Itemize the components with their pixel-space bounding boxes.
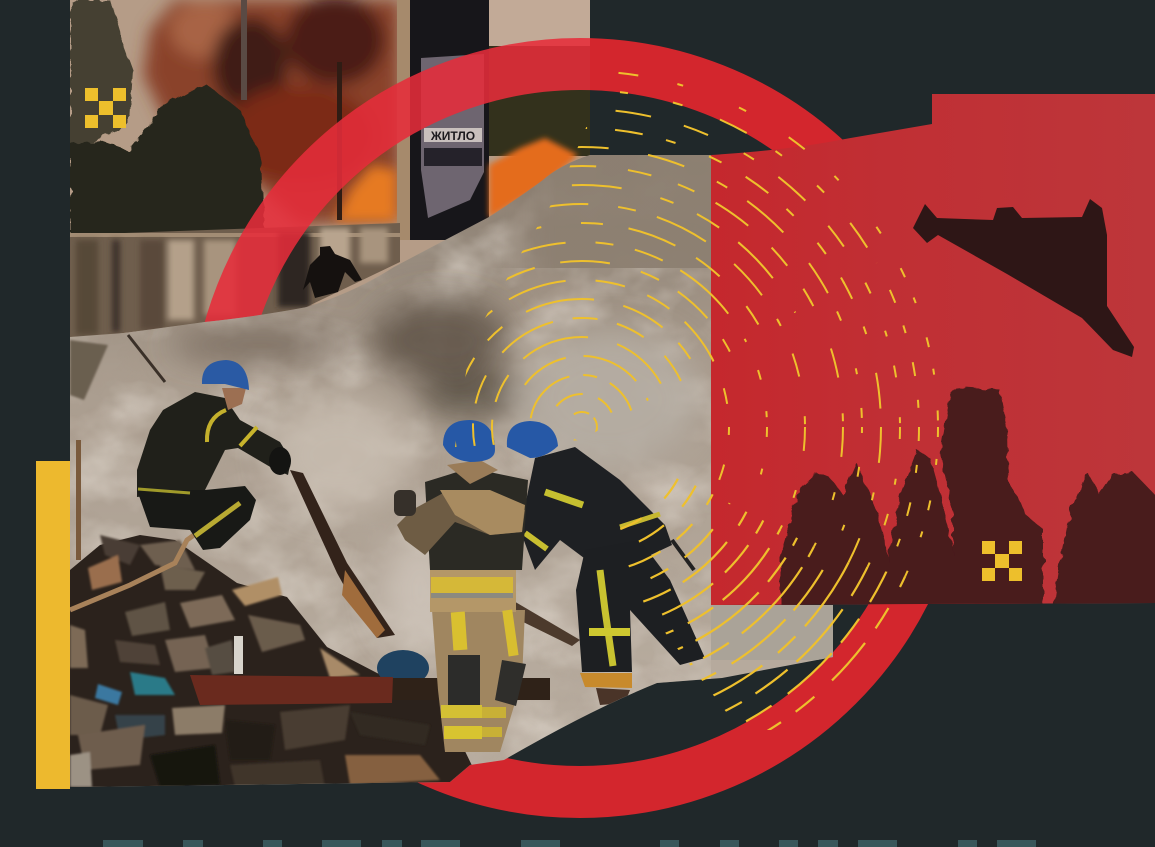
- pillar: [397, 0, 410, 240]
- yellow vertical bar: [36, 461, 70, 789]
- rings: upper sector: [455, 72, 882, 447]
- yellow checker icon right: [982, 541, 1022, 581]
- yellow checker icon top-left: [85, 88, 126, 128]
- broken board: [290, 470, 395, 638]
- photo: firefighters in smoke: [70, 150, 850, 790]
- rings: sparse right sector: [710, 262, 939, 576]
- rings: lower right sector: [620, 478, 906, 730]
- right patch: [489, 0, 590, 46]
- red panel: [711, 90, 1155, 610]
- fence: [70, 223, 400, 340]
- photo: explosion behind fence: ЖИТЛО: [430, 129, 475, 143]
- trees silhouettes: [780, 387, 1155, 610]
- street lamp poles: [241, 0, 247, 100]
- red ring translucent over photo: [204, 38, 590, 322]
- red ring solid: [418, 38, 928, 818]
- poster: [421, 54, 484, 218]
- rubble pile: [70, 520, 480, 790]
- yellow concentric dashed rings: [455, 72, 939, 730]
- running person: [303, 246, 362, 298]
- plank: [190, 675, 550, 705]
- firefighter left: [137, 360, 291, 550]
- firefighter right: [507, 421, 705, 705]
- bushes: [70, 83, 265, 236]
- photo: explosion behind fence: [70, 0, 590, 340]
- drone silhouette: [913, 199, 1134, 357]
- tree left: [70, 0, 133, 150]
- cropped heading tops along the bottom edge: [103, 840, 1036, 847]
- firefighter middle: [394, 420, 528, 752]
